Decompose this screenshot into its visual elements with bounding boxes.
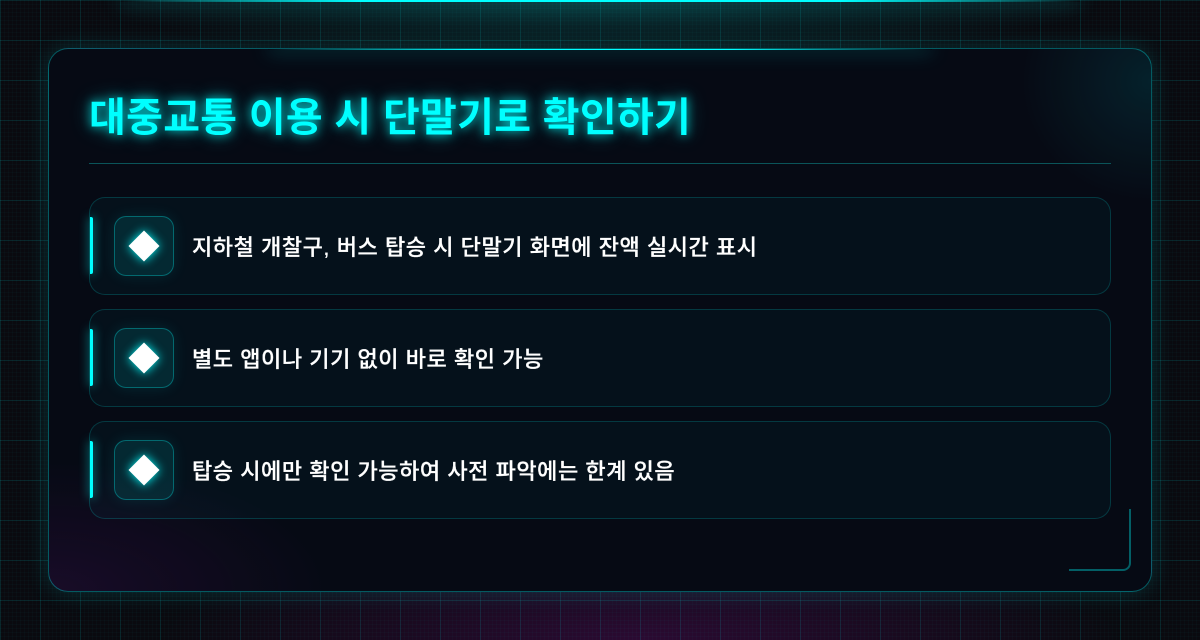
icon: diamond 2 — [114, 328, 174, 388]
corner bracket — [1069, 509, 1131, 571]
panel: main card — [48, 48, 1152, 592]
accent bar 3 — [90, 441, 93, 498]
title: 대중교통 이용 시 단말기로 확인하기 — [89, 96, 691, 140]
accent bar 2 — [90, 329, 93, 386]
card glow — [48, 48, 1152, 592]
list item 3 — [89, 421, 1111, 519]
icon: diamond 3 — [114, 440, 174, 500]
card top accent line — [268, 48, 932, 50]
list item 1 — [89, 197, 1111, 295]
item text 2: 별도 앱이나 기기 없이 바로 확인 가능 — [192, 347, 544, 372]
item text 1: 지하철 개찰구, 버스 탑승 시 단말기 화면에 잔액 실시간 표시 — [192, 235, 758, 260]
icon: diamond 1 — [114, 216, 174, 276]
top glow bar — [120, 0, 1080, 2]
item text 3: 탑승 시에만 확인 가능하여 사전 파악에는 한계 있음 — [192, 459, 675, 484]
list item 2 — [89, 309, 1111, 407]
accent bar 1 — [90, 217, 93, 274]
